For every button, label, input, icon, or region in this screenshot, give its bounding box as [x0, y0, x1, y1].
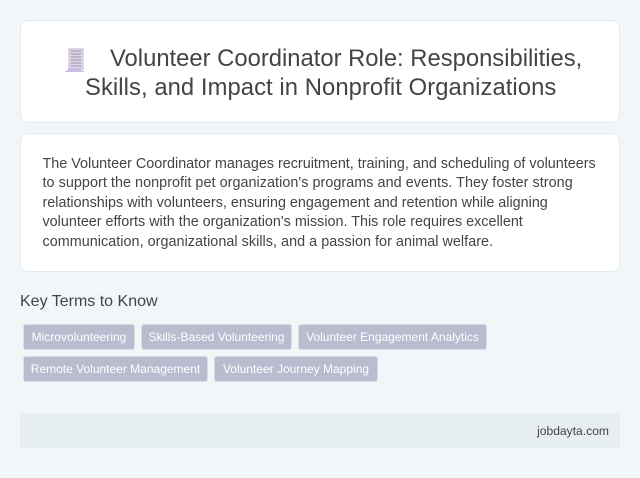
tag: Microvolunteering [32, 330, 126, 344]
tag [141, 324, 292, 350]
tag: Volunteer Engagement Analytics [306, 330, 479, 344]
description text: relationships with volunteers, ensuring engagement and retention while aligning [42, 195, 548, 211]
tag [23, 356, 208, 382]
panel: description card [20, 133, 620, 272]
description text: The Volunteer Coordinator manages recruitment, training, and scheduling of volunteers [42, 156, 596, 172]
tags: key terms [23, 324, 487, 382]
footer source: jobdayta.com [537, 424, 609, 438]
tag [23, 324, 135, 350]
tag [214, 356, 378, 382]
description text: communication, organizational skills, and a passion for animal welfare. [42, 234, 493, 250]
description text [42, 156, 596, 250]
tag: Skills-Based Volunteering [148, 330, 285, 344]
description text: volunteer efforts with the organization's mission. This role requires excellent [42, 214, 523, 230]
tag [298, 324, 487, 350]
panel: title card [20, 20, 620, 123]
heading: key terms: Key Terms to Know [20, 293, 158, 310]
tag: Volunteer Journey Mapping [223, 362, 369, 376]
description text: to support the nonprofit pet organization's programs and events. They foster strong [42, 175, 573, 191]
icon: document scroll [65, 48, 84, 72]
tag: Remote Volunteer Management [31, 362, 200, 376]
title line 1: Volunteer Coordinator Role: Responsibilities, [110, 45, 582, 72]
title line 2: Skills, and Impact in Nonprofit Organizations [85, 74, 556, 101]
footer bar [20, 414, 620, 448]
